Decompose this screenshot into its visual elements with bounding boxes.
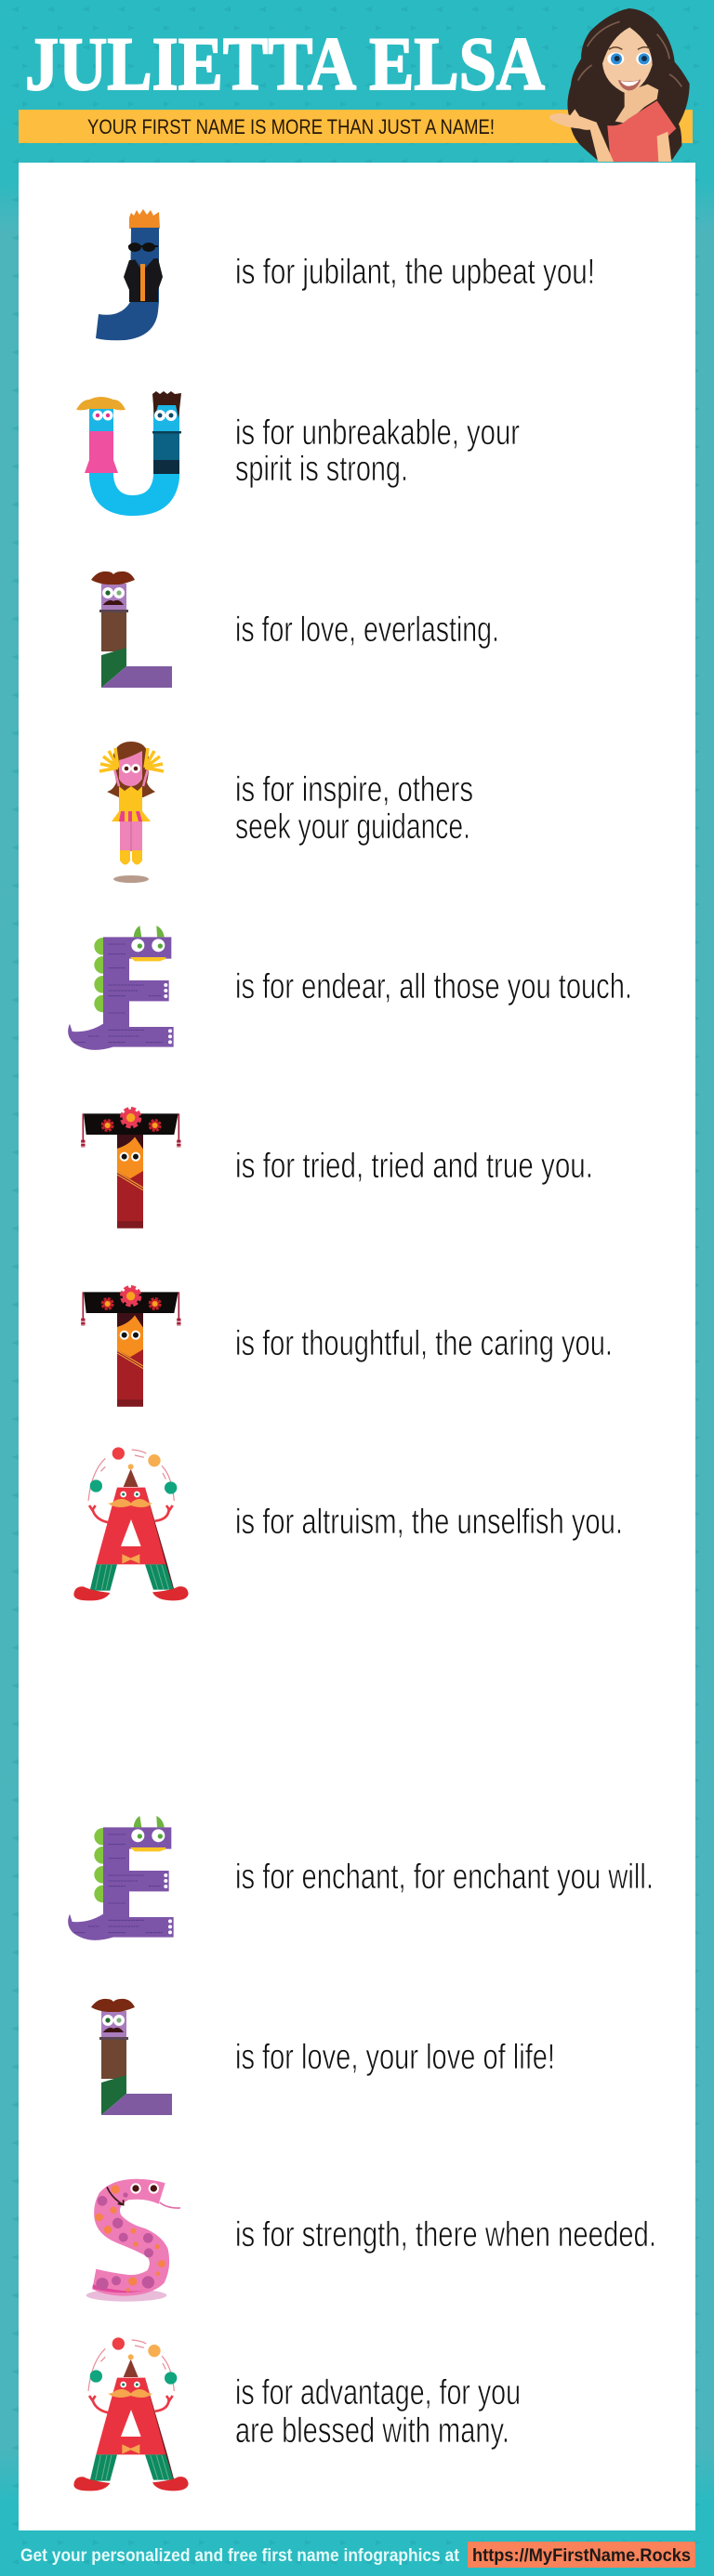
title: JULIETTA ELSA xyxy=(25,21,545,106)
letter L second xyxy=(91,1999,172,2115)
letter T xyxy=(83,1110,178,1229)
letter A second xyxy=(73,2337,189,2491)
subtitle band: YOUR FIRST NAME IS MORE THAN JUST A NAME! xyxy=(87,115,495,138)
letter E xyxy=(68,926,174,1050)
letter S xyxy=(86,2179,180,2302)
footer url badge: https://MyFirstName.Rocks xyxy=(472,2545,691,2566)
letter A xyxy=(73,1447,189,1600)
text: U: spirit is strong. xyxy=(235,450,408,489)
letter U xyxy=(76,391,181,516)
letter L xyxy=(91,572,172,688)
text: T second: is for thoughtful, the caring you. xyxy=(235,1324,613,1363)
letter T second xyxy=(83,1288,178,1407)
text: I: seek your guidance. xyxy=(235,808,470,847)
text: U xyxy=(235,414,520,489)
text: I: is for inspire, others xyxy=(235,770,473,809)
letter I xyxy=(99,742,164,883)
subtitle band xyxy=(19,110,693,143)
letter E second xyxy=(68,1816,174,1940)
text: L: is for love, everlasting. xyxy=(235,611,499,650)
text: J: is for jubilant, the upbeat you! xyxy=(235,253,595,292)
text: I xyxy=(235,770,473,847)
letter J xyxy=(96,209,163,340)
illustration: presenter woman xyxy=(549,8,690,162)
text: A second: is for advantage, for you xyxy=(235,2373,521,2412)
text: T: is for tried, tried and true you. xyxy=(235,1147,593,1186)
text: A second xyxy=(235,2373,521,2451)
text: L second: is for love, your love of life! xyxy=(235,2038,555,2077)
text: U: is for unbreakable, your xyxy=(235,414,520,453)
footer text: Get your personalized and free first name infographics at xyxy=(20,2546,460,2566)
text: A second: are blessed with many. xyxy=(235,2412,509,2451)
